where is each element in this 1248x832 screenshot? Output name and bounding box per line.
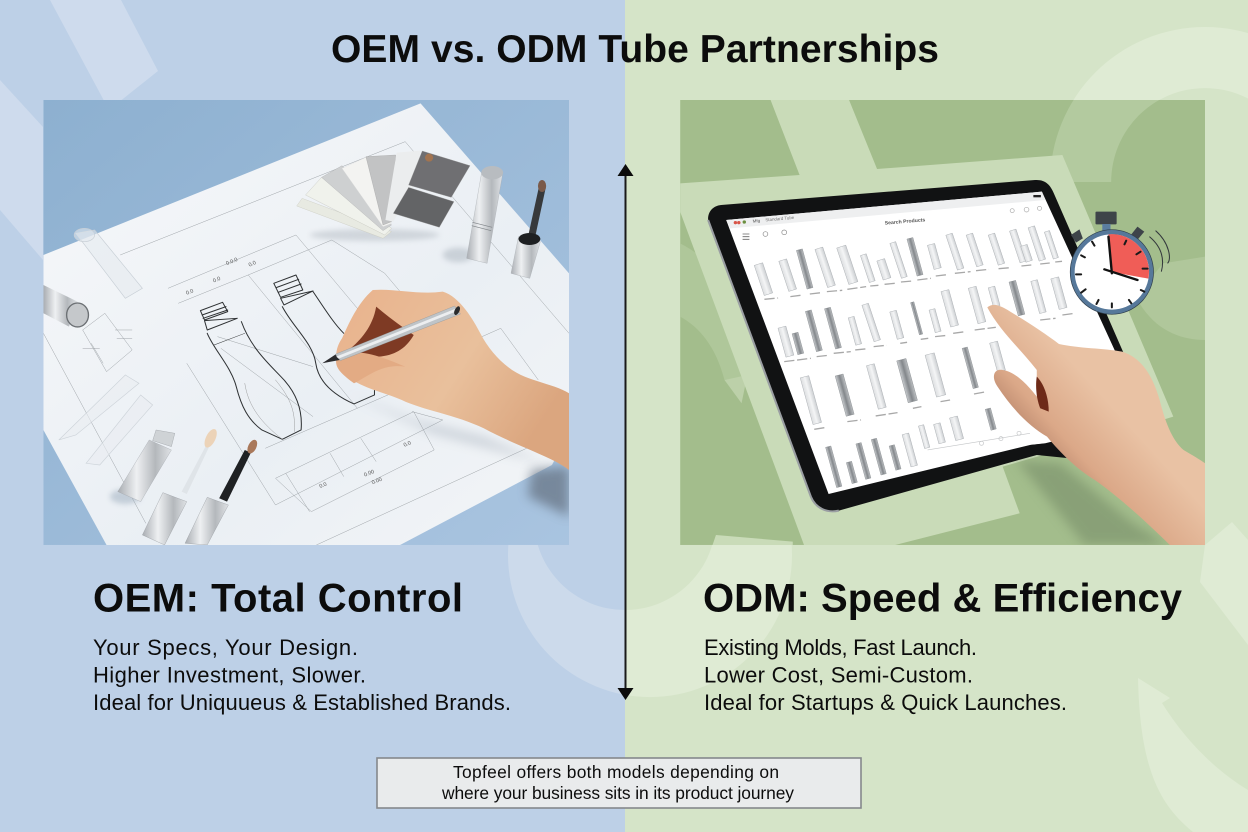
drawing: first bottle sketch [200, 302, 301, 439]
small dimension labels: 0.0 [403, 440, 412, 449]
text block: OEM details: Your Specs, Your Design. [93, 635, 358, 660]
clear vials, lower left [59, 375, 153, 465]
silver pen [322, 305, 461, 363]
text block: ODM details: Existing Molds, Fast Launch. [704, 635, 977, 660]
title: OEM vs. ODM Tube Partnerships [331, 28, 939, 71]
small dimension labels: 0.0 [185, 288, 195, 297]
text block: ODM details [704, 635, 1067, 715]
stopwatch icon [1070, 212, 1169, 314]
small dimension labels [185, 257, 412, 490]
text block: ODM details: Ideal for Startups & Quick Launches. [704, 690, 1067, 715]
heading: ODM: ODM: Speed & Efficiency [703, 576, 1183, 620]
material swatch fan [297, 151, 470, 241]
text block: OEM details: Higher Investment, Slower. [93, 662, 366, 688]
tablet device [708, 180, 1153, 512]
panel: ODM background [625, 0, 1248, 832]
hand holding pen [336, 290, 569, 517]
heading: OEM: OEM: Total Control [93, 576, 463, 620]
text block: ODM details: Lower Cost, Semi-Custom. [704, 662, 973, 688]
silver applicators, lower left [110, 427, 259, 545]
callout: Topfeel note: where your business sits in its product journey [441, 783, 794, 803]
tablet bottom nav [928, 431, 1030, 450]
text block: OEM details [93, 635, 511, 715]
screen toolbar: Standard Tube [765, 215, 795, 222]
screen toolbar [734, 195, 1042, 239]
image: ODM tablet catalogue with stopwatch [680, 100, 1205, 545]
blueprint frame and dimension lines [43, 142, 569, 545]
panel: OEM background [0, 0, 624, 694]
lipstick tube and wand, upper right [443, 166, 546, 278]
small dimension labels: 0.00 [371, 477, 383, 486]
blueprint paper [43, 103, 569, 545]
drawing: second bottle sketch [274, 275, 374, 404]
small dimension labels: 0.0 [212, 276, 222, 284]
catalogue captions [764, 261, 1075, 429]
clear tube, upper left [74, 228, 142, 298]
small dimension labels: 0.0.0 [225, 257, 239, 267]
background angular bands [680, 100, 1173, 545]
small dimension labels: 0.00 [363, 469, 375, 478]
divider arrow [618, 164, 634, 700]
catalogue tube grid [754, 226, 1067, 488]
background translucent arcs [680, 100, 1205, 403]
callout: Topfeel note: Topfeel offers both models depending on [453, 762, 779, 782]
metal tube, left edge [43, 285, 88, 327]
text block: OEM details: Ideal for Uniquueus & Established Brands. [93, 690, 511, 715]
tablet screen [726, 192, 1153, 494]
hand shadow on table [1016, 460, 1166, 545]
screen toolbar: Mfg [752, 218, 761, 224]
hand tapping screen [987, 305, 1205, 545]
callout: Topfeel note [377, 758, 861, 808]
screen toolbar: Search Products [885, 217, 926, 227]
small dimension labels: 0.0 [248, 260, 257, 268]
image: OEM design drawing on blueprint [43, 100, 569, 545]
small dimension labels: 0.0 [319, 482, 328, 490]
